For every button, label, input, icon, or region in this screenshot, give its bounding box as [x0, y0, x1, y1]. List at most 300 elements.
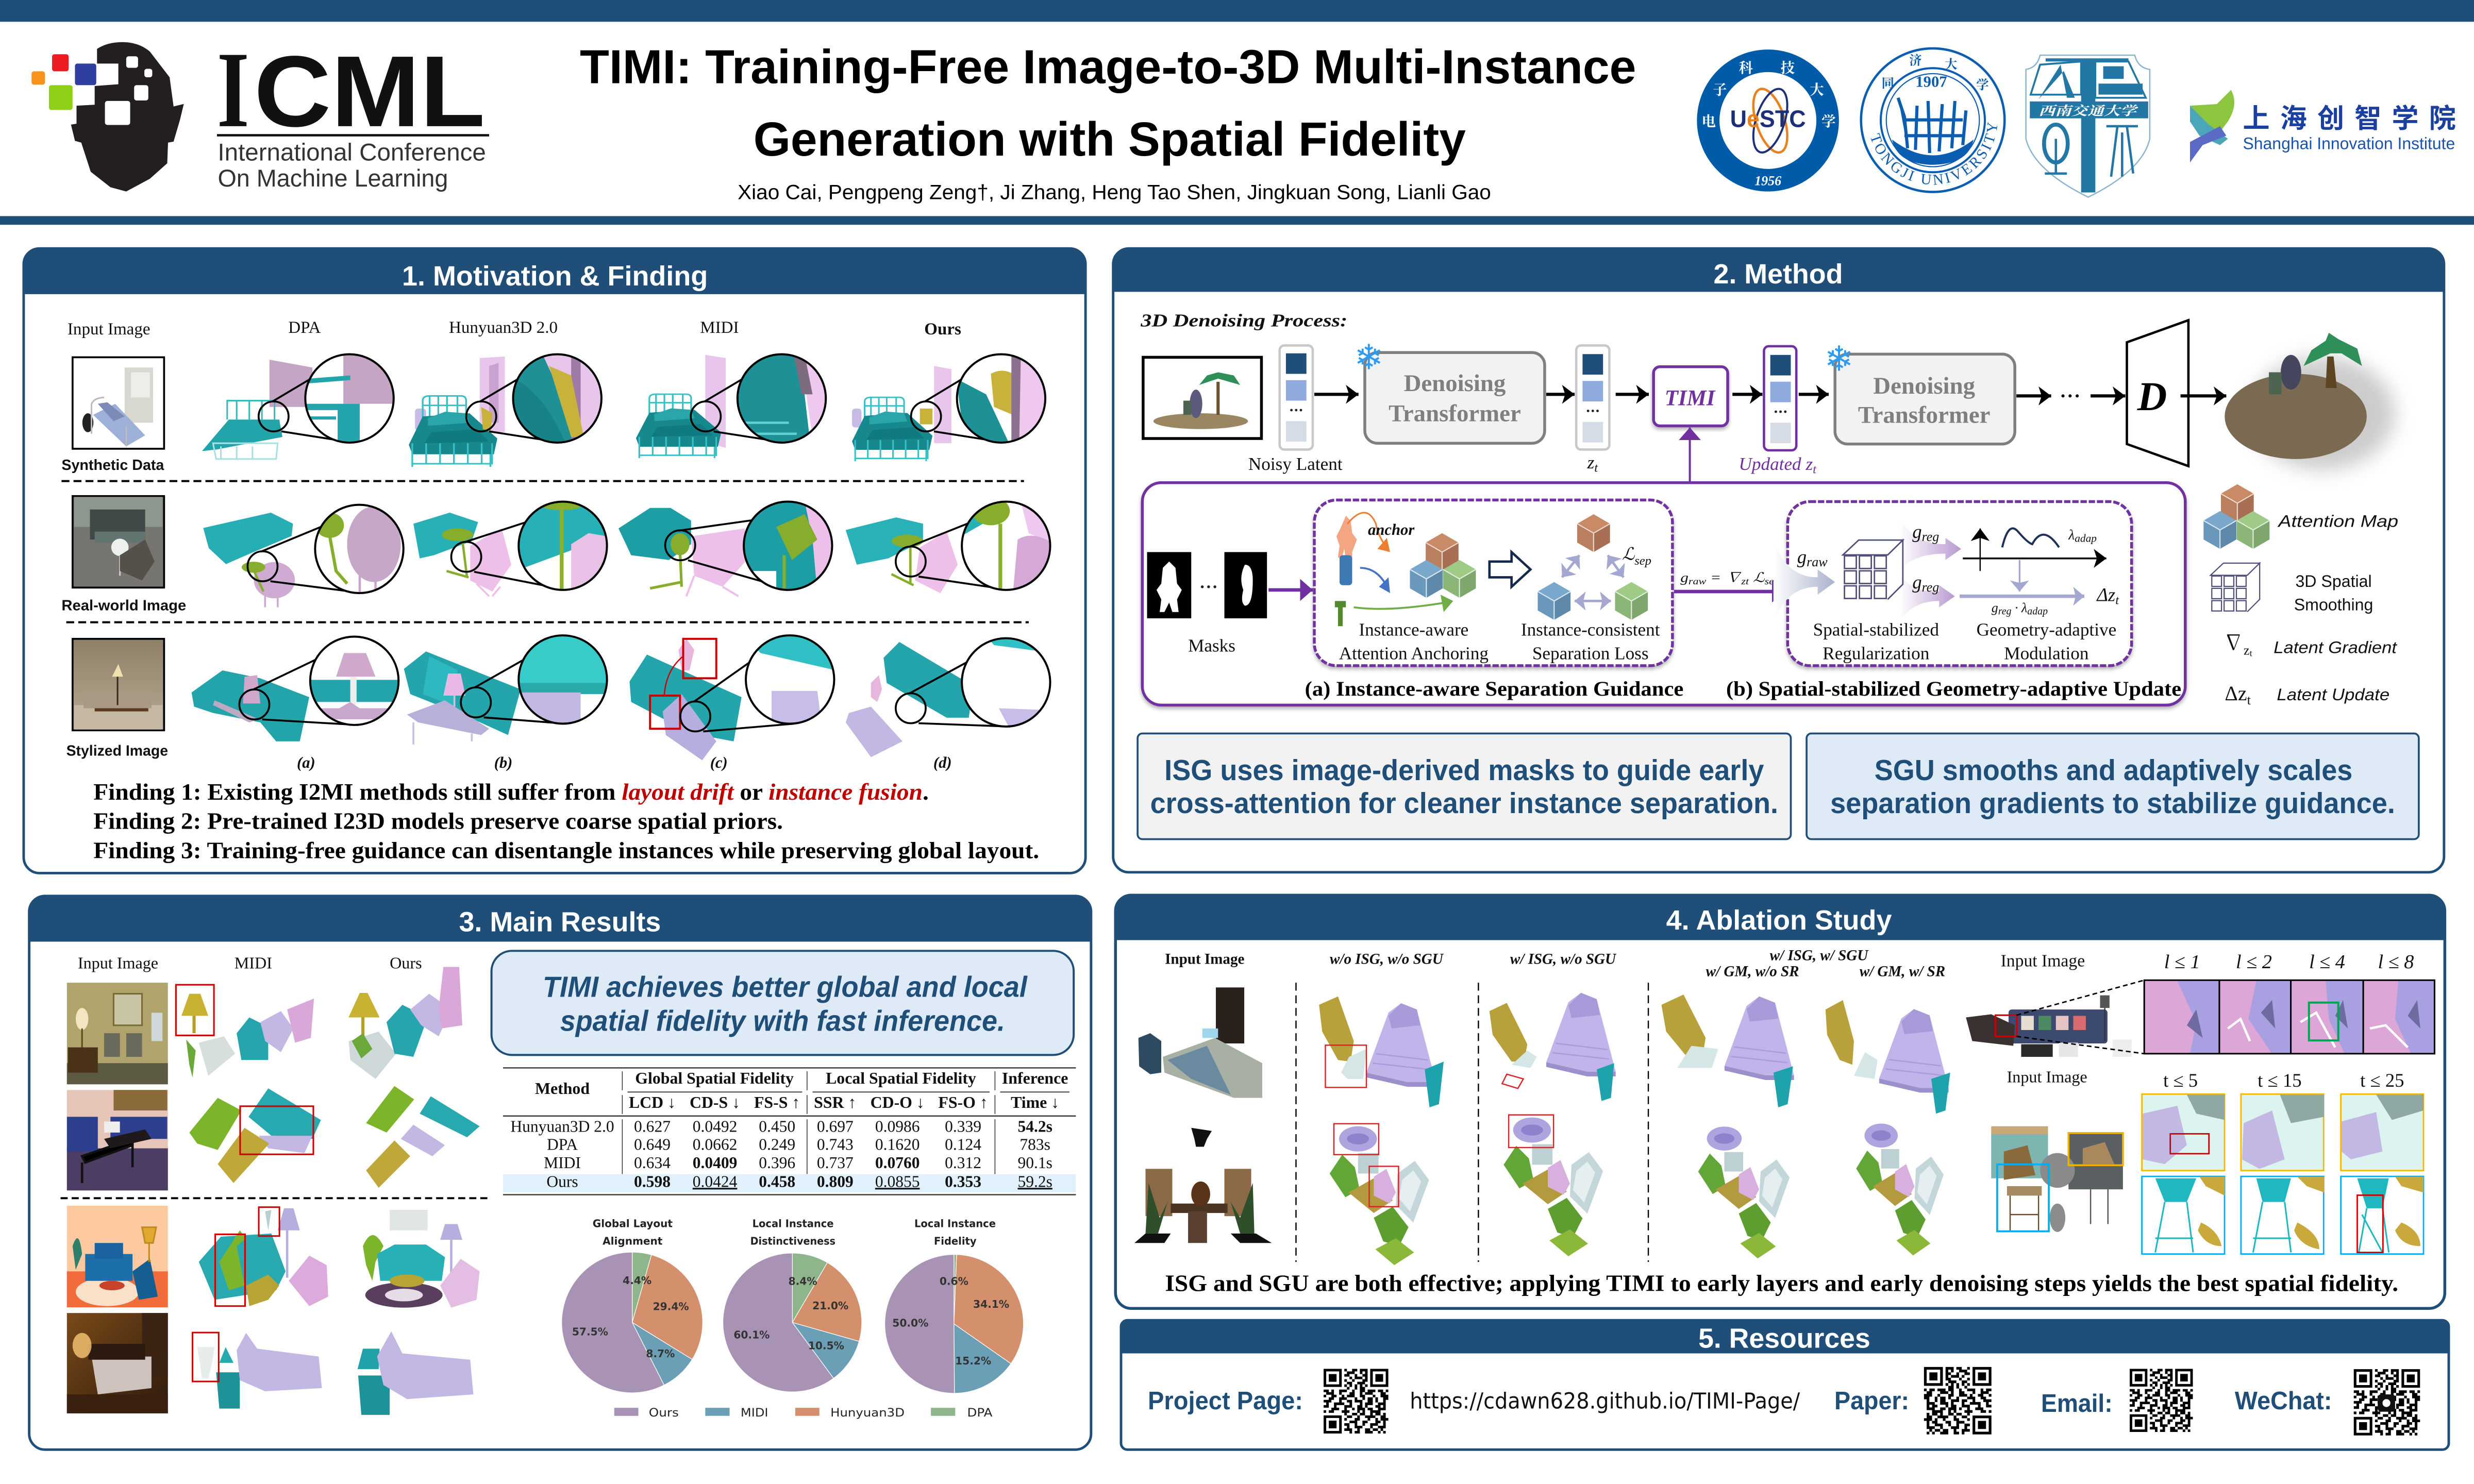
callout ISG: ISG uses image-derived masks to guide early [1164, 754, 1764, 787]
masks: Masks [1188, 635, 1235, 655]
legend: latent gradient: t [2250, 648, 2252, 658]
detail circle MIDI [745, 503, 831, 589]
pie chart: global layout alignment [562, 1252, 703, 1393]
separated cubes: ℒ [1622, 545, 1634, 564]
logo: UESTC: 子 [1713, 82, 1727, 98]
panel 4 header [1115, 895, 2445, 940]
detail circle Hunyuan [514, 356, 600, 442]
input image: real-world room [73, 496, 164, 587]
modulation plot: adap [2027, 605, 2048, 617]
arrow to dots [2016, 395, 2051, 396]
ISG sub-labels: Separation Loss [1532, 644, 1649, 664]
ISG sub-labels [1339, 620, 1660, 664]
attention cubes [1410, 533, 1476, 598]
column labels: Input Image [1165, 951, 1244, 967]
logo rule [217, 134, 489, 137]
column labels: w/ ISG, w/o SGU [1510, 951, 1617, 967]
ISG sub-labels: Instance-consistent [1521, 620, 1660, 640]
column labels: Input Image [78, 954, 158, 972]
logo: UESTC: 科 [1739, 60, 1753, 76]
arrow: latent to transformer [1314, 394, 1359, 395]
legend: latent update: Latent Update [2277, 685, 2389, 704]
results table: DPA [547, 1136, 578, 1154]
gradient formula: raw [1689, 576, 1707, 586]
arrow to decoder [2091, 395, 2125, 396]
panel 1 heading: 1. Motivation & Finding [402, 261, 708, 292]
detail circle outlines [310, 635, 1050, 727]
ISG sub-labels: Attention Anchoring [1339, 644, 1489, 664]
panel 3 heading: 3. Main Results [459, 907, 661, 937]
gradient formula: ℒ [1749, 570, 1765, 585]
results table: Method [535, 1080, 590, 1098]
top banner bar [0, 0, 2474, 22]
detail circle DPA [306, 356, 393, 442]
results table: 0.458 [759, 1172, 795, 1190]
Ours sofa result [846, 642, 974, 757]
panel: 4. Ablation Study [1115, 895, 2445, 1308]
callout SGU: separation gradients to stabilize guidance. [1830, 787, 2395, 820]
denoising process label: 3D Denoising Process: [1140, 311, 1347, 331]
red box MIDI row 1 [176, 985, 214, 1035]
model row 2 MIDI [189, 1088, 321, 1183]
results table: 90.1s [1017, 1154, 1052, 1172]
right labels top: l ≤ 4 [2309, 951, 2345, 973]
photo 3: cartoon room [67, 1206, 168, 1307]
legend: latent gradient: Latent Gradient [2274, 638, 2398, 656]
model row 4 MIDI [197, 1333, 322, 1409]
row labels: Synthetic Data [61, 457, 164, 474]
right input red box [1996, 1015, 2017, 1036]
ICML wordmark: I [217, 29, 249, 150]
results table: 0.0409 [693, 1154, 737, 1172]
arrow [1546, 394, 1575, 395]
logo: UESTC: 电 [1702, 113, 1716, 129]
denoising transformer 1: Denoising [1404, 370, 1506, 397]
denoising transformer 2: Denoising [1873, 373, 1975, 399]
logo: UESTC: 大 [1810, 82, 1824, 98]
ablation row 1: w/o ISG w/o SGU [1319, 997, 1444, 1107]
findings text: Finding 2: Pre-trained I23D models preserve coarse spatial priors. [93, 807, 783, 834]
TIMI block [1653, 367, 1728, 426]
column labels [1165, 947, 1945, 980]
column labels: Hunyuan3D 2.0 [449, 318, 558, 337]
SGU math labels: adap [2075, 532, 2097, 545]
slogan callout: TIMI achieves better global and local [543, 971, 1028, 1004]
input study [1134, 1128, 1272, 1243]
pie chart legend [614, 1407, 993, 1420]
decoder D [2127, 320, 2188, 466]
results table: 0.743 [817, 1136, 854, 1154]
panel 3 header [29, 896, 1091, 942]
column labels: w/ GM, w/o SR [1706, 963, 1799, 980]
red boxes MIDI row 3 [215, 1207, 279, 1306]
input image: stylized room [73, 639, 164, 730]
zoom circles [247, 530, 926, 581]
hollow arrow [1490, 552, 1530, 587]
logo: Southwest Jiaotong University: 西南交通大学 [2038, 104, 2138, 118]
results table: 0.450 [759, 1118, 795, 1136]
detail circle Hunyuan [516, 633, 612, 729]
latent: noisy [1280, 345, 1313, 449]
legend: latent update: t [2247, 693, 2251, 707]
SGU sub-labels [1813, 620, 2116, 664]
subfigure labels: (c) [710, 754, 728, 771]
paper label: Paper: [1834, 1387, 1909, 1415]
pie chart titles: Alignment [603, 1235, 662, 1247]
callout ISG [1138, 733, 1791, 839]
pie chart: local instance fidelity [885, 1255, 1024, 1393]
gradient flows [1774, 517, 1961, 623]
results table: 0.1620 [875, 1136, 920, 1154]
conference name line 1: International Conference [218, 139, 486, 166]
SGU math labels: g [1912, 521, 1922, 542]
subfigure labels [297, 754, 952, 771]
results table: 0.809 [817, 1172, 854, 1190]
ablation row 1: w/ ISG w/ SGU GM no SR [1661, 994, 1794, 1107]
SII English name: Shanghai Innovation Institute [2243, 134, 2455, 153]
modulation plot: Δz [2097, 584, 2115, 605]
panel 2 header [1113, 248, 2444, 292]
right labels top: Input Image [2001, 951, 2085, 970]
results table: 0.634 [634, 1154, 671, 1172]
right labels top: l ≤ 8 [2378, 951, 2414, 973]
denoising transformer 2: Transformer [1858, 401, 1990, 428]
arrow masks to ISG [1268, 589, 1313, 591]
right labels bottom: t ≤ 5 [2163, 1070, 2198, 1091]
column labels: w/o ISG, w/o SGU [1330, 951, 1444, 967]
pie chart: local instance distinctiveness: 10.5% [808, 1339, 844, 1352]
email label: Email: [2041, 1390, 2113, 1418]
detail circle outlines [305, 355, 1045, 443]
column labels: w/ ISG, w/ SGU [1770, 947, 1869, 964]
results table: 0.312 [945, 1154, 981, 1172]
gradient formula: sep [1765, 576, 1780, 586]
conference name line 2: On Machine Learning [218, 165, 448, 192]
right labels bottom [2007, 1068, 2404, 1091]
latent: updated [1764, 346, 1796, 450]
results table: 0.0492 [693, 1118, 737, 1136]
row labels: Real-world Image [61, 598, 186, 614]
pie chart: local instance distinctiveness [723, 1253, 862, 1392]
pie chart: local instance distinctiveness: 21.0% [812, 1300, 848, 1312]
project URL: https://cdawn628.github.io/TIMI-Page/ [1410, 1389, 1800, 1414]
cafe scene highlight boxes [1997, 1133, 2123, 1232]
pie chart: local instance fidelity: 15.2% [955, 1355, 991, 1367]
results table: 0.697 [817, 1118, 854, 1136]
anchor instances and arrows [1335, 513, 1453, 626]
logo: UESTC: 学 [1821, 113, 1836, 129]
callout ISG: cross-attention for cleaner instance separation. [1150, 787, 1778, 820]
latent captions [1248, 452, 1817, 476]
logo: Tongji University: 大 [1945, 57, 1957, 72]
legend: latent gradient: ∇ [2223, 632, 2244, 654]
Ours bed result [852, 366, 951, 461]
pie chart legend: Ours [649, 1407, 679, 1420]
3D output island [2225, 333, 2395, 470]
QR project [1324, 1370, 1389, 1432]
SGU sub-labels: Regularization [1823, 644, 1930, 664]
pie chart legend: MIDI [741, 1407, 768, 1420]
Hunyuan sofa result [404, 651, 521, 745]
caption a: (a) Instance-aware Separation Guidance [1305, 678, 1683, 700]
right labels bottom: t ≤ 15 [2258, 1070, 2302, 1091]
findings text: Finding 3: Training-free guidance can disentangle instances while preserving global layout. [93, 837, 1039, 863]
title: TIMI: Training-Free Image-to-3D Multi-Instance [580, 40, 1636, 94]
column labels: Input Image [68, 320, 151, 339]
slogan callout [492, 951, 1074, 1055]
subfigure labels: (a) [297, 754, 315, 771]
input image: synthetic bedroom [73, 357, 164, 449]
modulation plot: t [2115, 593, 2119, 607]
slogan callout: spatial fidelity with fast inference. [560, 1005, 1005, 1038]
zoom circles [239, 687, 926, 731]
title: Generation with Spatial Fidelity [754, 112, 1466, 166]
denoising transformer 2 [1835, 354, 2015, 444]
legend: attention map: Attention Map [2277, 512, 2398, 530]
latent captions: t [1594, 461, 1598, 475]
panel: 3. Main Results [29, 896, 1091, 1449]
divider [61, 1198, 490, 1199]
pie chart: local instance fidelity: 50.0% [892, 1317, 928, 1329]
column labels: Ours [390, 954, 422, 972]
results table: 0.0424 [693, 1172, 738, 1190]
pie chart: local instance distinctiveness: 60.1% [733, 1328, 770, 1341]
denoising transformer 1: Transformer [1389, 400, 1521, 427]
gradient formula: = ∇ [1706, 570, 1741, 585]
modulation plot: · λ [2011, 600, 2027, 615]
detail circle outlines [315, 501, 1050, 593]
dots [2061, 394, 2079, 397]
MIDI sofa result [629, 639, 742, 761]
guidance module frame [1142, 483, 2185, 705]
ablation row 1: w/ ISG w/o SGU [1490, 993, 1616, 1101]
logo: UESTC: 1956 [1754, 174, 1782, 189]
results table: CD-S ↓ [690, 1093, 740, 1111]
modulation plot [1960, 528, 2119, 617]
legend: latent gradient [2223, 632, 2398, 658]
results table: 0.0855 [875, 1172, 920, 1190]
logo: Shanghai Innovation Institute [2190, 90, 2456, 162]
QR paper [1924, 1368, 1992, 1433]
photo 1: waiting room [67, 983, 168, 1084]
SGU math labels [1797, 521, 2097, 595]
panel 1 header [24, 248, 1085, 294]
Ours chair result [846, 517, 958, 593]
results table: 0.737 [817, 1154, 854, 1172]
subfigure labels: (d) [933, 754, 952, 771]
latent captions: Noisy Latent [1248, 454, 1343, 474]
right labels bottom: Input Image [2007, 1068, 2087, 1086]
ablation row 2 columns [1330, 1118, 1944, 1265]
pie chart titles: Distinctiveness [750, 1235, 835, 1247]
results table: Hunyuan3D 2.0 [510, 1118, 614, 1136]
Hunyuan bed result [409, 357, 505, 467]
ISG sub-labels: Instance-aware [1359, 620, 1468, 640]
pie chart titles [593, 1218, 996, 1247]
denoising transformer 1 [1365, 352, 1545, 443]
panel 4 heading: 4. Ablation Study [1666, 905, 1892, 936]
logo: UESTC [1697, 49, 1839, 192]
3D smoothing grid [1843, 540, 1903, 599]
SGU sub-labels: Modulation [2004, 644, 2089, 664]
zoom lines [261, 519, 1010, 593]
SGU math labels: g [1912, 571, 1922, 593]
modulation plot: reg [1998, 605, 2012, 617]
results table: 0.339 [945, 1118, 981, 1136]
pie chart: global layout alignment: 29.4% [653, 1300, 689, 1312]
SGU math labels: reg [1922, 580, 1939, 595]
red box [1325, 1045, 1366, 1087]
detail circle Ours [964, 503, 1049, 589]
column labels: MIDI [235, 954, 272, 972]
icon: snowflake 2: ❄ [1825, 338, 1853, 379]
TIMI block: TIMI [1665, 386, 1716, 411]
logo: Tongji University: 学 [1976, 78, 1989, 92]
QR email [2130, 1370, 2193, 1431]
panel 5 heading: 5. Resources [1698, 1324, 1870, 1354]
right input cafe scene [1991, 1126, 2123, 1232]
red quad [1502, 1074, 1524, 1088]
logo: Tongji University: 1907 [1915, 73, 1947, 90]
legend: latent gradient: z [2244, 643, 2250, 657]
arrow [1616, 394, 1649, 395]
pie chart: local instance distinctiveness: 8.4% [789, 1275, 817, 1287]
results table: 54.2s [1017, 1118, 1052, 1136]
modulation plot: g [1992, 600, 1998, 615]
legend: smoothing: 3D Spatial [2295, 572, 2372, 591]
results table: 0.396 [759, 1154, 795, 1172]
column labels: MIDI [700, 318, 739, 337]
results table: 0.649 [634, 1136, 671, 1154]
column labels [78, 954, 422, 972]
gradient formula: g [1680, 570, 1687, 585]
legend: latent update [2225, 682, 2389, 707]
model row 3 MIDI [199, 1208, 328, 1306]
right labels top: l ≤ 1 [2164, 951, 2200, 973]
pie chart titles: Local Instance [753, 1218, 834, 1230]
DPA bed result [202, 360, 312, 459]
legend [2203, 484, 2398, 707]
latent captions: Updated z [1739, 454, 1813, 474]
arrow up to TIMI [1690, 428, 1691, 483]
title [580, 40, 1636, 166]
pie chart titles: Fidelity [934, 1235, 977, 1247]
callout SGU [1807, 733, 2419, 839]
model row 2 Ours [366, 1086, 480, 1188]
SGU math labels: λ [2068, 527, 2075, 543]
row 1: synthetic data results [202, 347, 1049, 467]
SGU math labels: reg [1922, 529, 1939, 544]
pie chart legend: DPA [967, 1407, 993, 1420]
input bedroom [1139, 987, 1262, 1098]
SII Chinese name: 上海创智学院 [2243, 104, 2456, 134]
logo: Southwest Jiaotong University [2026, 55, 2150, 197]
right labels top [2001, 951, 2414, 973]
project page label: Project Page: [1148, 1387, 1303, 1415]
column labels: Ours [924, 320, 961, 339]
arrow ISG to SGU [1674, 591, 1784, 592]
MIDI bed result [636, 355, 726, 458]
panel: 1. Motivation & Finding [24, 248, 1085, 873]
results table: LCD ↓ [629, 1093, 676, 1111]
photo 4: dark bedroom [67, 1313, 168, 1413]
SGU sub-labels: Spatial-stabilized [1813, 620, 1939, 640]
ICML wordmark: CML [254, 35, 485, 148]
column labels [68, 318, 961, 339]
SGU dashed box [1787, 501, 2132, 666]
model row 3 Ours [363, 1210, 480, 1308]
detail circle MIDI [742, 633, 836, 727]
SGU math labels: g [1797, 546, 1807, 567]
authors: Xiao Cai, Pengpeng Zeng†, Ji Zhang, Heng Tao Shen, Jingkuan Song, Lianli Gao [738, 181, 1491, 204]
model row 4 Ours [358, 1331, 473, 1415]
pie chart: local instance fidelity: 34.1% [973, 1298, 1009, 1310]
decoder D: D [2137, 374, 2167, 419]
QR wechat [2354, 1371, 2420, 1434]
row labels [61, 457, 186, 759]
pie chart: global layout alignment: 4.4% [623, 1274, 651, 1287]
results table [503, 1068, 1076, 1195]
logo: Tongji University: 济 [1909, 54, 1922, 68]
logo: ICML [31, 29, 489, 192]
icon: ICML head [31, 42, 184, 192]
results table: SSR ↑ [814, 1093, 856, 1111]
latent captions: z [1587, 452, 1594, 473]
timestep crop grid [2142, 1094, 2423, 1254]
results table: Local Spatial Fidelity [826, 1069, 976, 1087]
detail circle DPA [319, 507, 401, 592]
column labels: w/ GM, w/ SR [1860, 963, 1945, 980]
column labels: DPA [288, 318, 321, 337]
pie chart: local instance fidelity: 0.6% [940, 1275, 968, 1287]
arrow [1799, 394, 1829, 395]
results table: Global Spatial Fidelity [635, 1069, 794, 1087]
results table: Inference [1002, 1069, 1068, 1087]
results table: 0.0760 [875, 1154, 920, 1172]
ablation caption: ISG and SGU are both effective; applying TIMI to early layers and early denoising steps yields the best spatial fidelity. [1165, 1270, 2398, 1296]
detail circle Hunyuan [520, 503, 606, 589]
red boxes row 2 [1334, 1115, 1553, 1207]
logo: Tongji University: TONGJI UNIVERSITY [1871, 122, 1997, 185]
DPA sofa result [192, 670, 309, 741]
red box MIDI row 2 [240, 1106, 313, 1154]
subfigure labels: (b) [494, 754, 512, 771]
anchor instances and arrows: anchor [1368, 521, 1415, 538]
results table: MIDI [544, 1154, 581, 1172]
icon: SII ribbon [2190, 90, 2234, 162]
Hunyuan chair result [413, 513, 511, 596]
results table: 0.353 [945, 1172, 981, 1190]
right labels top: l ≤ 2 [2236, 951, 2272, 973]
right labels bottom: t ≤ 25 [2360, 1070, 2404, 1091]
red box MIDI row 4 [192, 1333, 219, 1381]
panel: 2. Method [1113, 248, 2444, 872]
SGU sub-labels: Geometry-adaptive [1977, 620, 2116, 640]
callout SGU: SGU smooths and adaptively scales [1875, 754, 2352, 787]
row labels: Stylized Image [66, 743, 168, 759]
detail circle DPA [308, 634, 403, 729]
results table: CD-O ↓ [871, 1093, 925, 1111]
zoom lines [253, 653, 1010, 731]
latent captions: t [1813, 462, 1817, 476]
results table: FS-O ↑ [938, 1093, 988, 1111]
results table: 59.2s [1017, 1172, 1052, 1190]
gradient formula: zt [1741, 576, 1749, 586]
logo: UESTC: UeSTC [1730, 106, 1806, 132]
pie chart: global layout alignment: 8.7% [646, 1347, 675, 1360]
row 2: real-world results [203, 497, 1054, 608]
results table: 0.598 [634, 1172, 671, 1190]
